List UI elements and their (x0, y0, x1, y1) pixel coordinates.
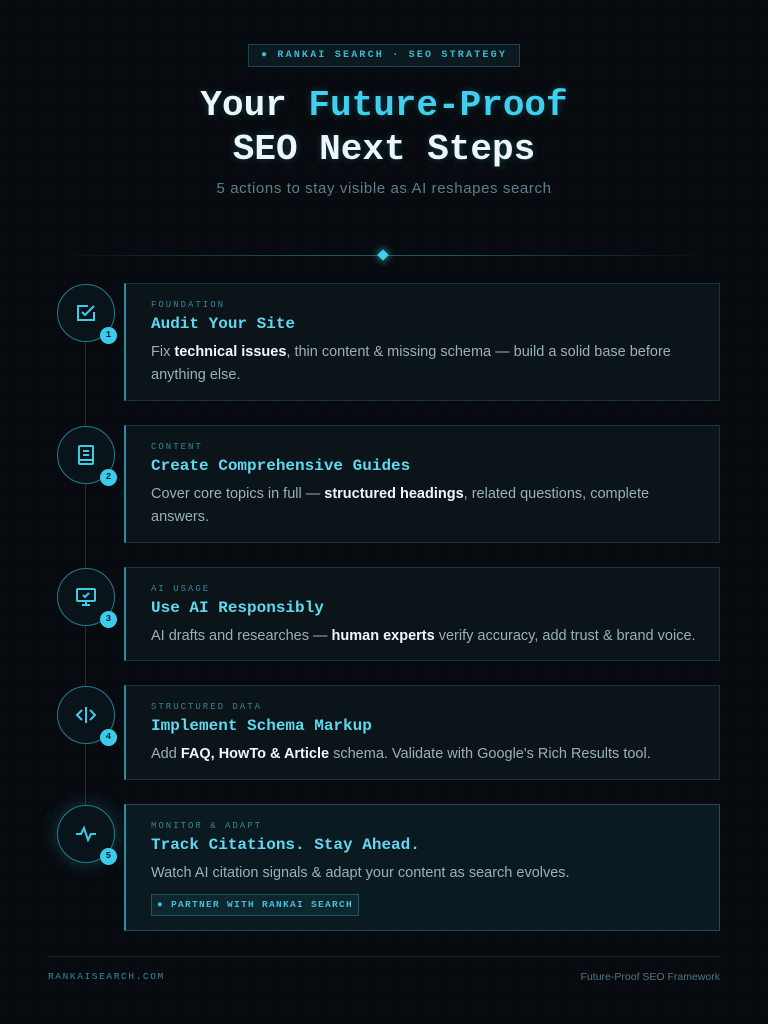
footer left: RANKAISEARCH.COM (48, 971, 165, 982)
panel: step 2 (124, 425, 720, 543)
top tag (248, 44, 520, 67)
icon: step 2 book: 2 (106, 472, 111, 482)
top tag: ● RANKAI SEARCH · SEO STRATEGY (261, 50, 507, 61)
panel: step 2: CONTENT (151, 442, 203, 452)
icon: step 3 monitor (57, 568, 115, 626)
panel: step 5: Watch AI citation signals & adapt your content as search evolves. (151, 865, 570, 881)
icon: step 1 checkbox (57, 284, 115, 342)
panel: step 4: Implement Schema Markup (151, 717, 372, 735)
icon: step 2 book (57, 426, 115, 484)
footer line (48, 956, 720, 957)
panel: step 3: Use AI Responsibly (151, 599, 324, 617)
panel: step 5 (124, 804, 720, 931)
icon: step 3 monitor: 3 (106, 614, 111, 624)
footer right: Future-Proof SEO Framework (581, 971, 720, 983)
icon: step 5 pulse: 5 (106, 851, 111, 861)
panel: step 5: Track Citations. Stay Ahead. (151, 836, 420, 854)
panel: step 2: Create Comprehensive Guides (151, 457, 410, 475)
title: SEO Next Steps (233, 129, 535, 170)
vertical timeline line (85, 340, 86, 810)
panel: step 4 (124, 685, 720, 780)
panel: step 5: MONITOR & ADAPT (151, 821, 262, 831)
panel: step 2: Cover core topics in full — structured headings, related questions, complete answers. (151, 486, 649, 525)
title (200, 85, 568, 170)
panel: step 3: AI USAGE (151, 584, 210, 594)
icon: step 4 code (57, 686, 115, 744)
panel: step 1: FOUNDATION (151, 300, 225, 310)
panel: step 1 (124, 283, 720, 401)
button: partner: ● PARTNER WITH RANKAI SEARCH (157, 899, 353, 910)
title: Your Future-Proof (200, 85, 568, 126)
button: partner (151, 894, 359, 916)
divider with diamond (56, 255, 712, 256)
icon: step 1 checkbox: 1 (106, 330, 111, 340)
panel: step 4: Add FAQ, HowTo & Article schema. Validate with Google's Rich Results tool. (151, 746, 651, 762)
icon: step 4 code: 4 (106, 732, 111, 742)
subtitle: 5 actions to stay visible as AI reshapes search (216, 180, 552, 197)
panel: step 3: AI drafts and researches — human experts verify accuracy, add trust & brand voice. (151, 628, 696, 644)
panel: step 1: Audit Your Site (151, 315, 295, 333)
panel: step 4: STRUCTURED DATA (151, 702, 262, 712)
icon: step 5 pulse (57, 805, 115, 863)
panel: step 3 (124, 567, 720, 661)
panel: step 1: Fix technical issues, thin content & missing schema — build a solid base before anything else. (151, 344, 671, 383)
